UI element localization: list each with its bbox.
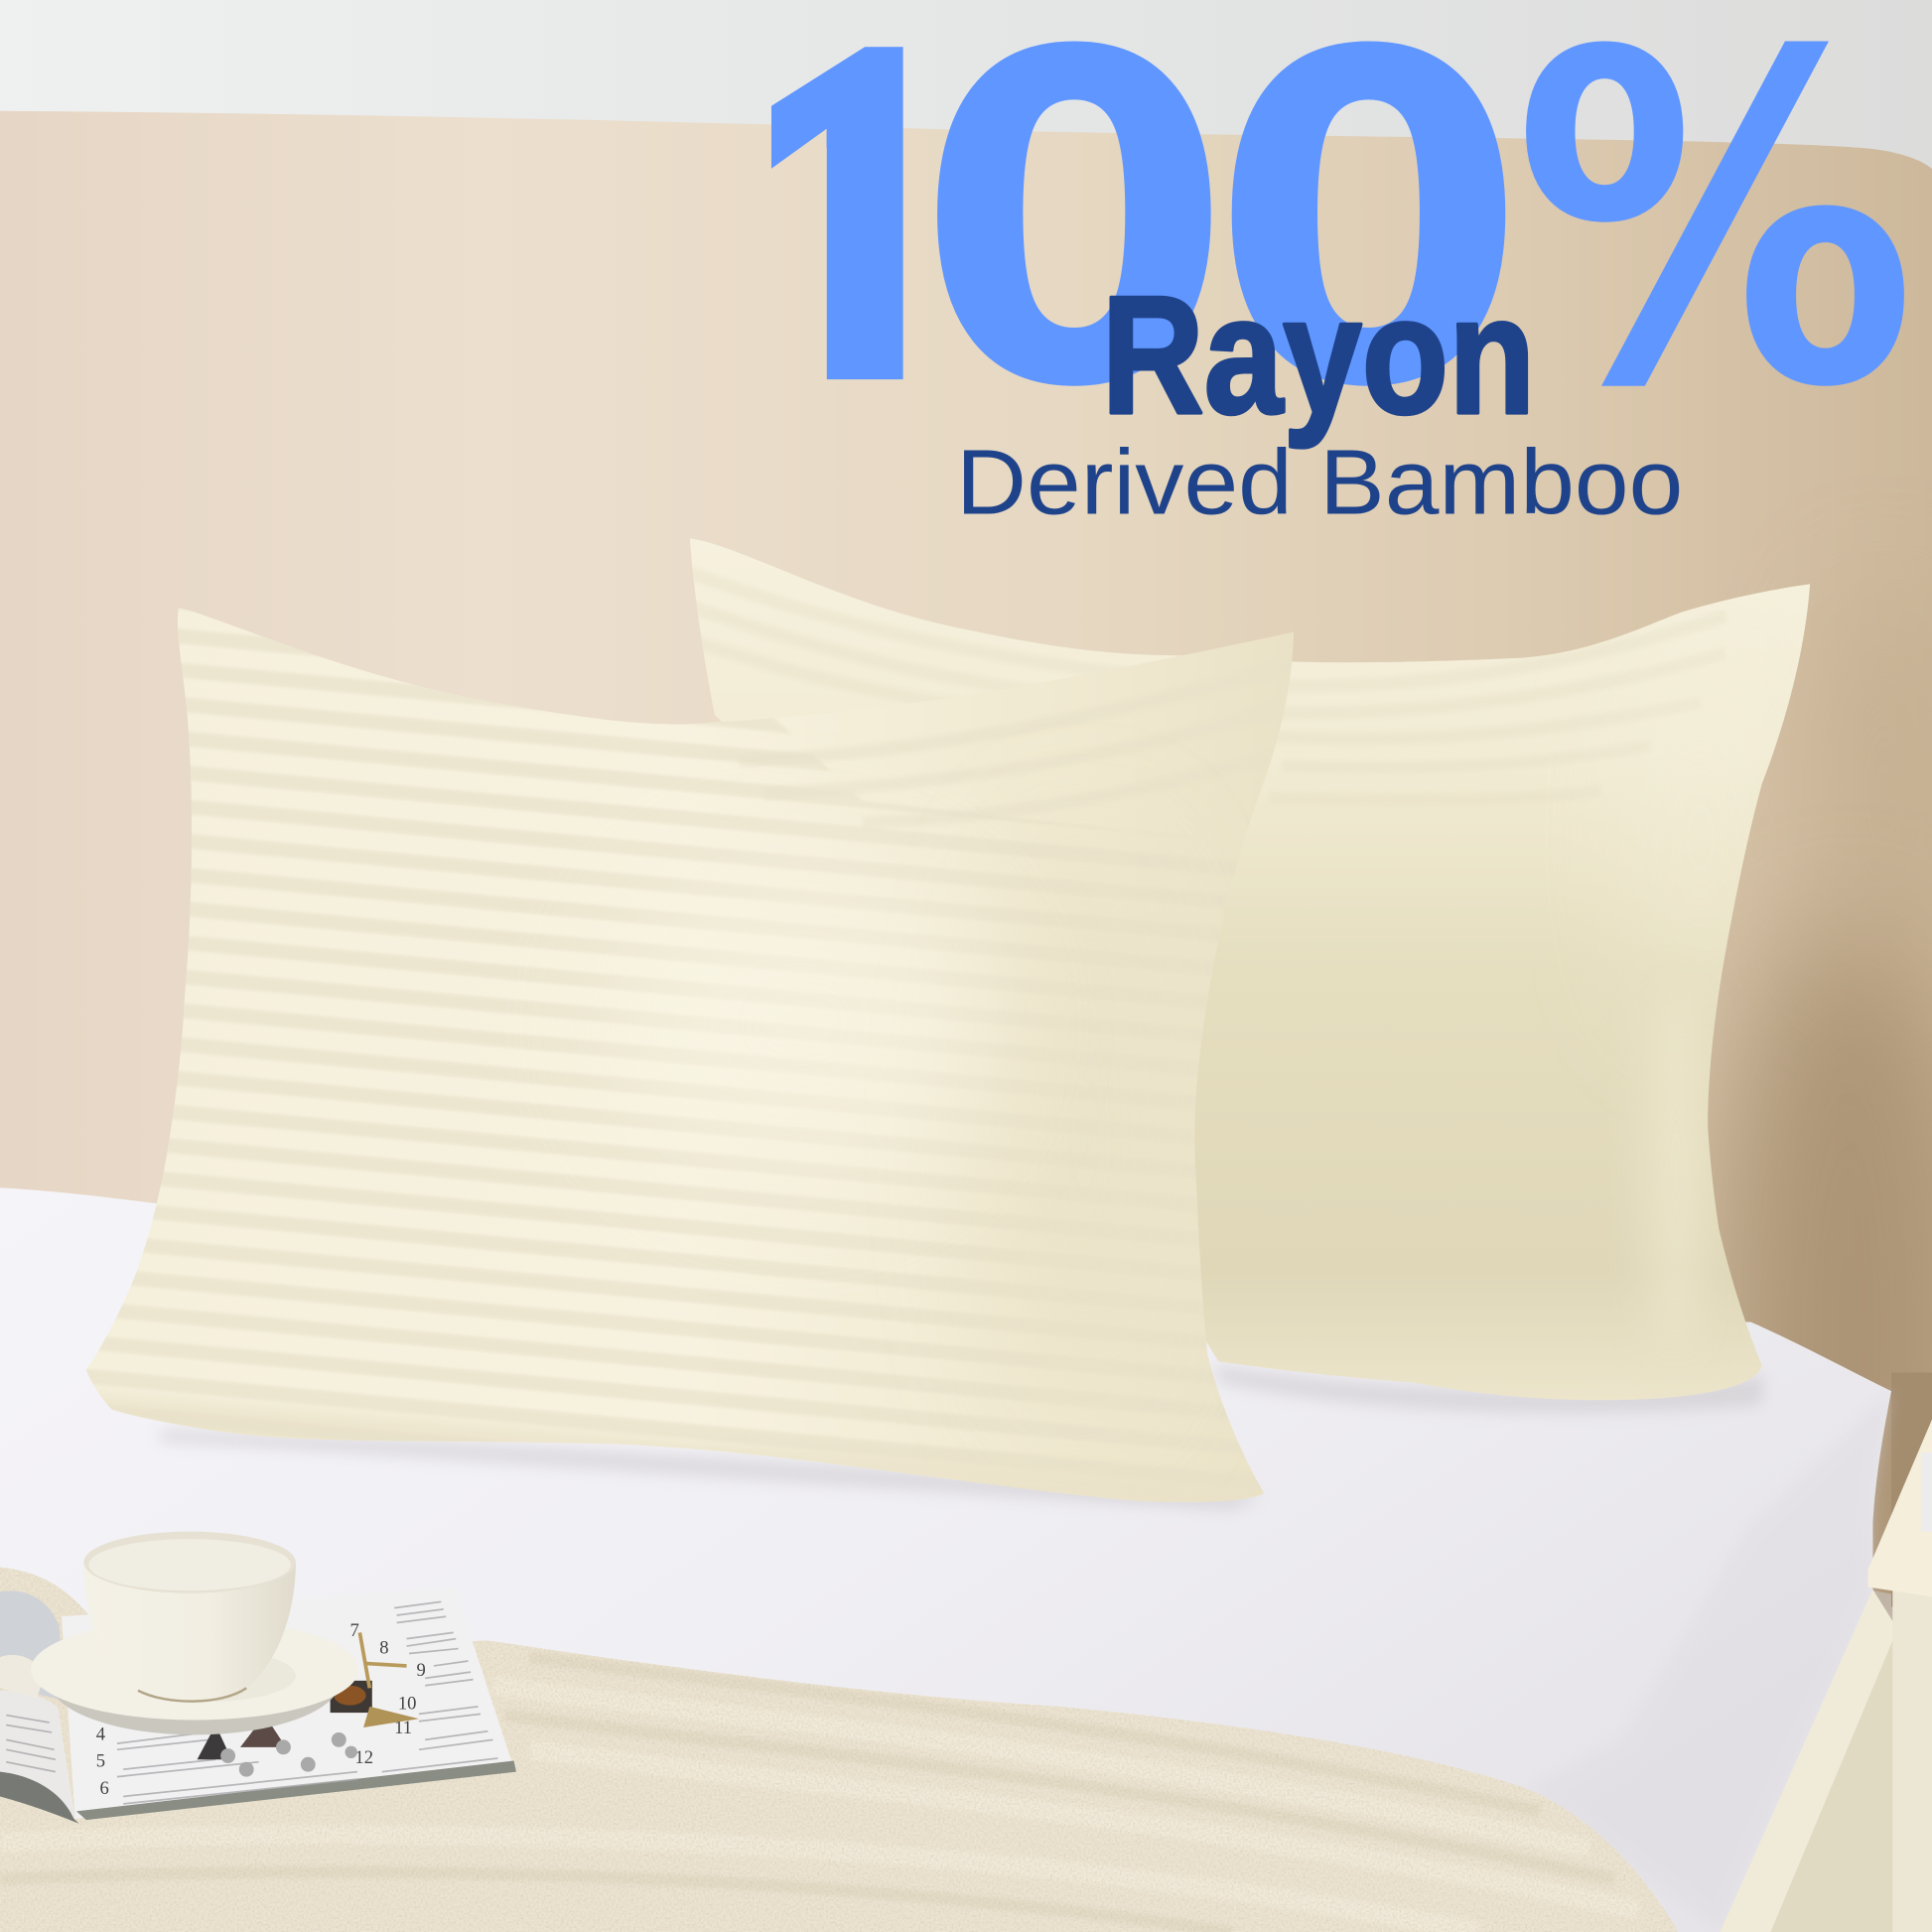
magazine: lamp pictures xyxy=(198,1632,419,1777)
teacup xyxy=(83,1532,296,1702)
magazine: page numbers xyxy=(96,1620,426,1799)
bed: white fitted mattress xyxy=(0,1187,1891,1932)
magazine: page numbers: 11 xyxy=(394,1718,412,1738)
magazine: page numbers: 10 xyxy=(398,1693,416,1714)
magazine: page numbers: 9 xyxy=(416,1660,426,1681)
bed frame rail and nightstand xyxy=(1721,1420,1932,1932)
pillow: back striped cream pillow xyxy=(690,538,1810,1400)
magazine: page numbers: 6 xyxy=(100,1778,109,1799)
magazine: page numbers: 8 xyxy=(379,1638,389,1659)
magazine: page numbers: 4 xyxy=(96,1724,106,1744)
pillow: front striped cream pillow xyxy=(73,592,1307,1516)
subheading: Rayon: Rayon xyxy=(1102,261,1535,449)
subheading: Derived Bamboo: Derived Bamboo xyxy=(956,431,1683,534)
background: wall xyxy=(0,0,1932,173)
headline: 100% xyxy=(771,42,1904,386)
magazine: page numbers: 5 xyxy=(96,1751,105,1772)
shadows under the pillows xyxy=(160,1365,1764,1511)
blanket: woven beige throw xyxy=(0,1565,1688,1932)
magazine: page numbers: 7 xyxy=(349,1620,359,1641)
magazine: page numbers: 12 xyxy=(354,1747,373,1768)
saucer xyxy=(31,1619,358,1734)
magazine: open lifestyle magazine xyxy=(0,1587,516,1824)
